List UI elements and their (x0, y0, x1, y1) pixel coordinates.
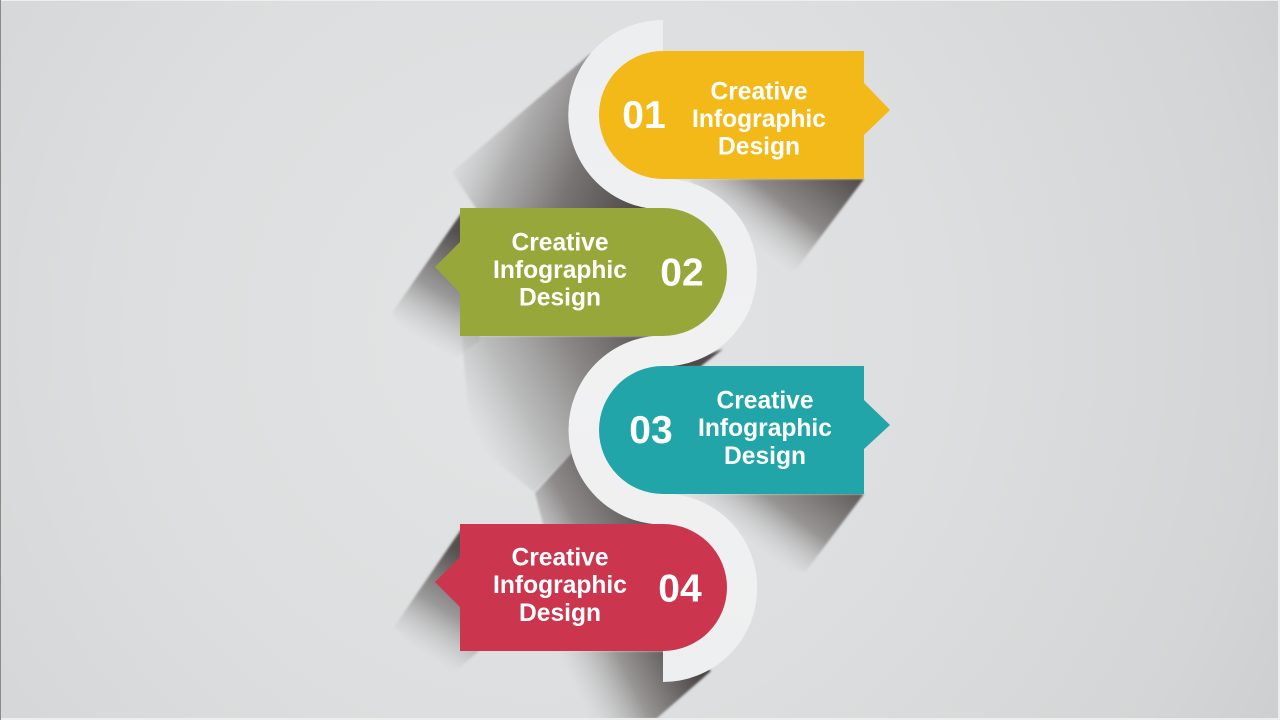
shadow: step 2 arrow side (392, 212, 480, 370)
label 3: Infographic (698, 415, 832, 442)
tab shape 2 (435, 208, 727, 336)
tab shape 4 (435, 524, 727, 651)
label 2 (493, 230, 627, 312)
step 4: red tab (435, 524, 727, 651)
step 1: yellow tab (599, 51, 890, 179)
shadow: step 2 tab underside (462, 336, 712, 492)
shadow: step 4 arrow side (394, 528, 480, 680)
tab shape 3 (599, 366, 890, 494)
label 2: Design (519, 284, 601, 312)
label 4 (493, 544, 627, 627)
label 1 (692, 78, 826, 160)
long shadows (392, 54, 864, 719)
tab shape 1 (599, 51, 890, 179)
shadow: step 3 tab (690, 494, 864, 571)
shadow: small sliver by step 3 (670, 349, 723, 367)
label 4: Creative (511, 544, 609, 572)
label 1: Creative (710, 78, 808, 106)
step 2: olive tab (435, 208, 727, 336)
label 3: Design (724, 443, 806, 470)
label 2: Creative (511, 230, 609, 256)
label 3 (698, 388, 832, 470)
label 1: Infographic (692, 106, 826, 133)
label 2: Infographic (493, 257, 627, 284)
shadow: step 4 underside (520, 651, 711, 719)
white S-curve ribbon (584, 36, 742, 666)
shadow: upper ribbon bend (452, 54, 660, 290)
step 3: teal tab (599, 366, 890, 494)
label 3: Creative (716, 388, 814, 414)
shadow: step 1 tab (690, 179, 864, 271)
number 02: 02 (660, 252, 704, 294)
number 01: 01 (622, 94, 666, 137)
number 04: 04 (658, 568, 702, 610)
shadow: step 3 ribbon bend (535, 440, 660, 590)
number 03: 03 (629, 409, 673, 452)
label 4: Design (519, 600, 601, 627)
label 1: Design (718, 134, 800, 160)
label 4: Infographic (493, 572, 627, 599)
